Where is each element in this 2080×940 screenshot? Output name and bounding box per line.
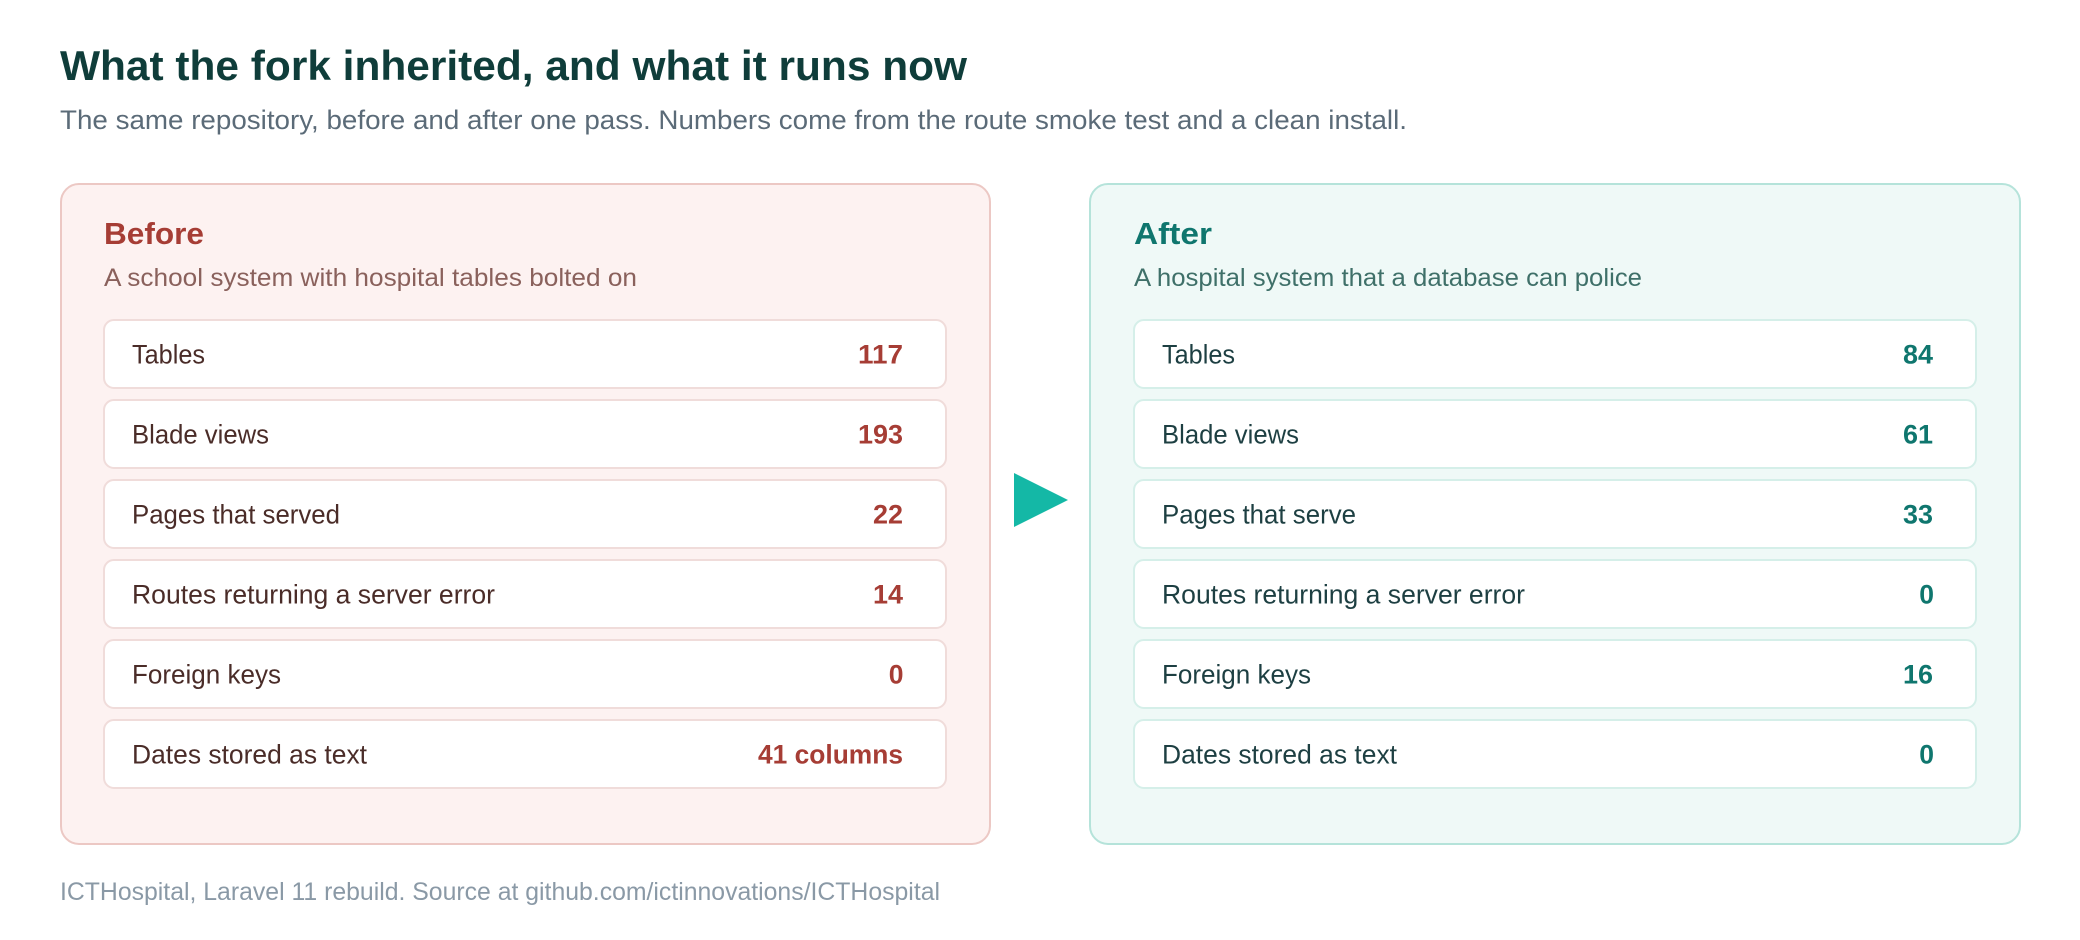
row: foreign keys before: 0	[889, 660, 904, 690]
row: tables before	[104, 320, 946, 388]
row: pages after: Pages that serve	[1162, 500, 1356, 530]
title: What the fork inherited, and what it runs now	[60, 42, 967, 89]
row: foreign keys after: Foreign keys	[1162, 660, 1311, 690]
row: pages after	[1134, 480, 1976, 548]
panel: after	[1090, 184, 2020, 844]
panel heading: before: Before	[104, 216, 204, 251]
row: tables before: 117	[858, 340, 903, 370]
row: dates before: 41 columns	[758, 740, 903, 770]
row: blade views after	[1134, 400, 1976, 468]
row: dates after: Dates stored as text	[1162, 740, 1398, 770]
row: server errors after: Routes returning a server error	[1162, 580, 1525, 610]
row: server errors before: Routes returning a server error	[132, 580, 495, 610]
row: pages before	[104, 480, 946, 548]
panel: before	[61, 184, 990, 844]
row: foreign keys before	[104, 640, 946, 708]
panel heading: after: After	[1134, 216, 1212, 251]
row: tables after	[1134, 320, 1976, 388]
row: blade views before: Blade views	[132, 420, 269, 450]
row: pages before: 22	[873, 500, 903, 530]
row: blade views before	[104, 400, 946, 468]
row: blade views before: 193	[858, 420, 903, 450]
row: dates after	[1134, 720, 1976, 788]
subtitle: The same repository, before and after one pass. Numbers come from the route smoke test and a clean install.	[60, 105, 1407, 135]
row: pages before: Pages that served	[132, 500, 340, 530]
row: server errors before	[104, 560, 946, 628]
panel background: after	[1090, 184, 2020, 844]
row: foreign keys before: Foreign keys	[132, 660, 281, 690]
row: dates before: Dates stored as text	[132, 740, 368, 770]
panel background: before	[61, 184, 990, 844]
row: tables after: 84	[1903, 340, 1933, 370]
footer: ICTHospital, Laravel 11 rebuild. Source at github.com/ictinnovations/ICTHospital	[60, 878, 940, 906]
row: dates before	[104, 720, 946, 788]
row: pages after: 33	[1903, 500, 1933, 530]
row: server errors after	[1134, 560, 1976, 628]
row: tables after: Tables	[1162, 340, 1235, 370]
panel description: before: A school system with hospital tables bolted on	[104, 264, 637, 292]
row: server errors before: 14	[873, 580, 903, 610]
row: foreign keys after: 16	[1903, 660, 1933, 690]
row: foreign keys after	[1134, 640, 1976, 708]
arrow	[1014, 473, 1068, 527]
row: tables before: Tables	[132, 340, 205, 370]
row: blade views after: Blade views	[1162, 420, 1299, 450]
row: blade views after: 61	[1903, 420, 1933, 450]
row: dates after: 0	[1919, 740, 1934, 770]
row: server errors after: 0	[1919, 580, 1934, 610]
panel description: after: A hospital system that a database can police	[1134, 264, 1642, 292]
